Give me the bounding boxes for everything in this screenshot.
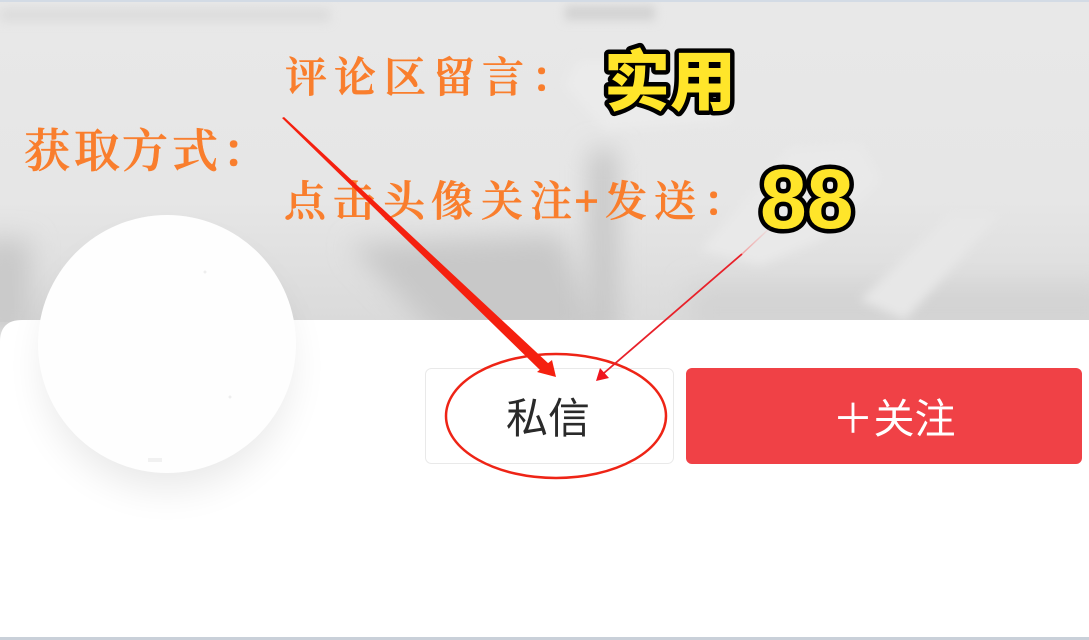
keyword: 88: 88 xyxy=(760,152,853,246)
arrow: thick red to 私信 xyxy=(282,117,556,377)
text: 评论区留言: 评论区留言： xyxy=(285,55,573,102)
avatar with shadow xyxy=(38,215,296,488)
background: blurred gray header xyxy=(0,0,1089,340)
button: 私信 xyxy=(426,368,674,464)
button: 关注: ＋关注 xyxy=(832,396,956,442)
button: 关注 xyxy=(686,368,1082,464)
heading: 获取方式: 获取方式： xyxy=(24,126,268,177)
white profile card xyxy=(0,320,1089,637)
keyword: 实用: 实用 xyxy=(604,45,736,119)
button: 私信: 私信 xyxy=(506,395,590,442)
callout ellipse xyxy=(446,354,666,478)
arrow: thin red to 私信 xyxy=(596,226,772,381)
bottom edge strip xyxy=(0,637,1089,640)
text: 点击头像关注+发送: 点击头像关注+发送： xyxy=(284,177,745,226)
